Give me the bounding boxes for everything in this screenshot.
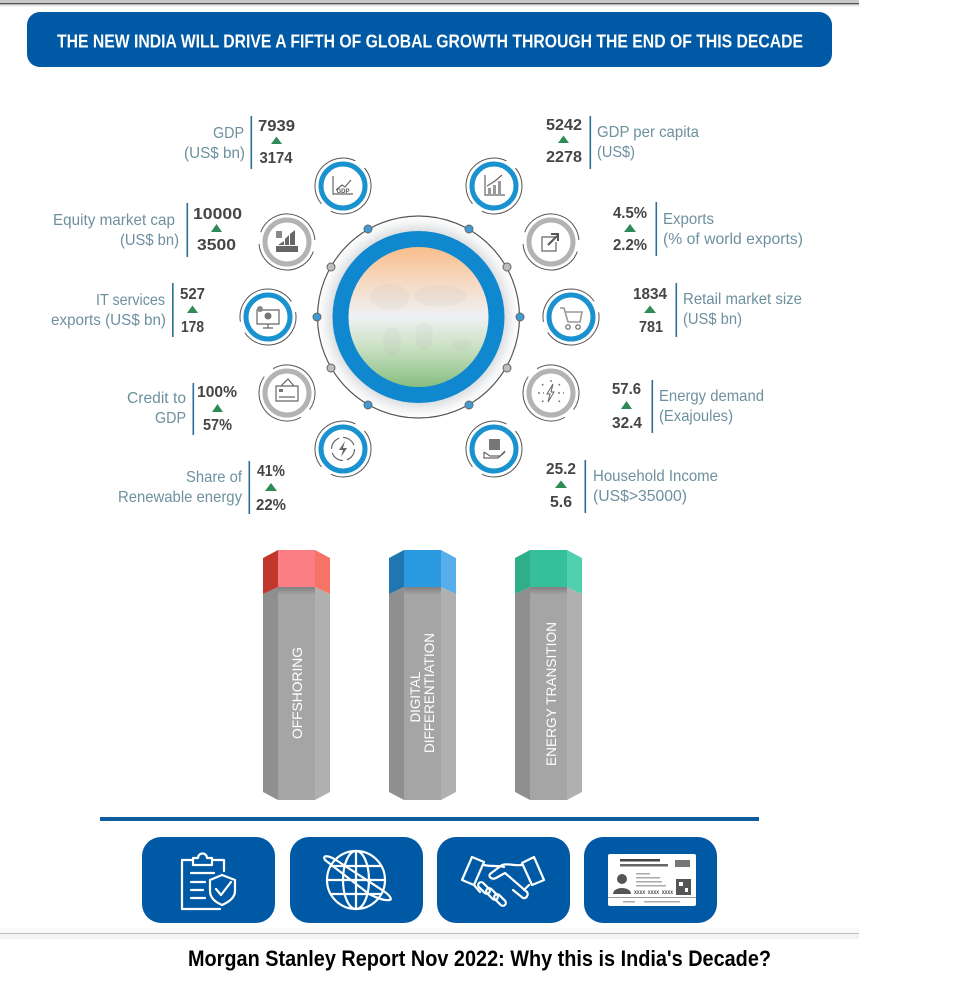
icon: GDP chart: GDP — [336, 189, 350, 195]
metric: GDP — [184, 116, 295, 169]
ring connector dots — [313, 225, 524, 409]
metric: Equity market cap: 3500 — [197, 237, 236, 254]
metric: IT services exports: 527 — [180, 286, 205, 303]
metric: Household income — [546, 460, 718, 513]
metric: GDP per capita: (US$) — [597, 144, 635, 161]
metric: Credit to GDP: 57% — [203, 417, 232, 434]
divider rule — [100, 817, 759, 821]
icon: credit card — [249, 355, 325, 431]
icon: renewable energy — [304, 410, 382, 488]
metric: Household income: (US$>35000) — [593, 488, 687, 505]
metric: Retail market size: (US$ bn) — [683, 311, 742, 328]
icon: GDP chart — [304, 147, 382, 225]
title banner — [27, 12, 832, 67]
metric: Share of renewable energy: Share of — [186, 469, 243, 486]
metric: IT services exports: 178 — [181, 319, 204, 336]
title banner: THE NEW INDIA WILL DRIVE A FIFTH OF GLOBAL GROWTH THROUGH THE END OF THIS DECADE — [57, 32, 803, 52]
icon: exports arrow — [515, 206, 587, 278]
metric: Exports: (% of world exports) — [663, 231, 803, 248]
icon: shopping cart — [539, 285, 603, 349]
pillar: digital differentiation — [389, 550, 456, 800]
metric: Energy demand: Energy demand — [659, 388, 764, 405]
metric: Credit to GDP: Credit to — [127, 390, 186, 407]
metric: GDP per capita: 5242 — [546, 117, 582, 134]
metric: Retail market size — [633, 283, 802, 337]
icon: energy spark — [513, 355, 589, 431]
top window bar — [0, 0, 859, 6]
metric: Share of renewable energy: Renewable energy — [118, 489, 242, 506]
metric: GDP per capita — [546, 116, 699, 169]
icon: GDP per capita chart — [455, 147, 533, 225]
metric: Energy demand: 57.6 — [612, 381, 641, 398]
metric: Equity market cap: Equity market cap — [53, 212, 175, 229]
icon: equity market — [251, 206, 323, 278]
metric: Household income: 25.2 — [546, 461, 576, 478]
metric: Equity market cap: 10000 — [193, 206, 242, 223]
pillar: energy transition: ENERGY TRANSITION — [543, 622, 559, 766]
icon tile: globe — [290, 837, 423, 923]
metric: GDP: (US$ bn) — [184, 145, 245, 162]
metric: Household income: 5.6 — [550, 494, 572, 511]
metric: Retail market size: Retail market size — [683, 291, 802, 308]
metric: Share of renewable energy: 22% — [256, 497, 286, 514]
metric: Energy demand: 32.4 — [612, 415, 642, 432]
icon tile: clipboard with shield — [142, 837, 275, 923]
metric: IT services exports — [51, 283, 205, 337]
bottom window edge — [0, 928, 859, 939]
pillar: offshoring — [263, 550, 330, 800]
metric: Share of renewable energy — [118, 461, 286, 514]
icon tile: ID card: XXXX XXXX XXXX — [634, 890, 673, 896]
metric: GDP: GDP — [213, 125, 244, 142]
metric: Household income: Household Income — [593, 468, 718, 485]
caption: Morgan Stanley Report Nov 2022: Why this is India's Decade? — [188, 946, 771, 971]
pillar: digital differentiation: DIFFERENTIATION — [421, 633, 437, 753]
metric: Retail market size: 1834 — [633, 286, 667, 303]
pillar: energy transition — [515, 550, 582, 800]
metric: Exports — [613, 202, 803, 256]
pillar: digital differentiation: DIGITAL — [407, 671, 423, 722]
central globe — [318, 216, 520, 418]
metric: Credit to GDP — [127, 383, 237, 435]
metric: Energy demand: (Exajoules) — [659, 408, 733, 425]
metric: Exports: 4.5% — [613, 205, 647, 222]
metric: GDP per capita: 2278 — [546, 149, 582, 166]
metric: Energy demand — [612, 380, 764, 433]
metric: GDP: 3174 — [260, 150, 293, 167]
metric: IT services exports: IT services — [96, 292, 165, 309]
metric: Retail market size: 781 — [639, 319, 663, 336]
icon tile: handshake — [437, 837, 570, 923]
metric: Exports: Exports — [663, 211, 714, 228]
metric: IT services exports: exports (US$ bn) — [51, 312, 166, 329]
metric: Credit to GDP: 100% — [197, 384, 237, 401]
metric: GDP per capita: GDP per capita — [597, 124, 699, 141]
metric: Exports: 2.2% — [613, 237, 647, 254]
pillar: offshoring: OFFSHORING — [289, 647, 305, 739]
metric: Equity market cap: (US$ bn) — [120, 232, 179, 249]
icon tile: ID card — [584, 837, 717, 923]
icon: household income — [455, 410, 533, 488]
metric: GDP: 7939 — [258, 118, 295, 135]
metric: Share of renewable energy: 41% — [257, 463, 285, 480]
icon: IT services — [236, 285, 300, 349]
metric: Credit to GDP: GDP — [155, 410, 186, 427]
metric: Equity market cap — [53, 203, 242, 257]
